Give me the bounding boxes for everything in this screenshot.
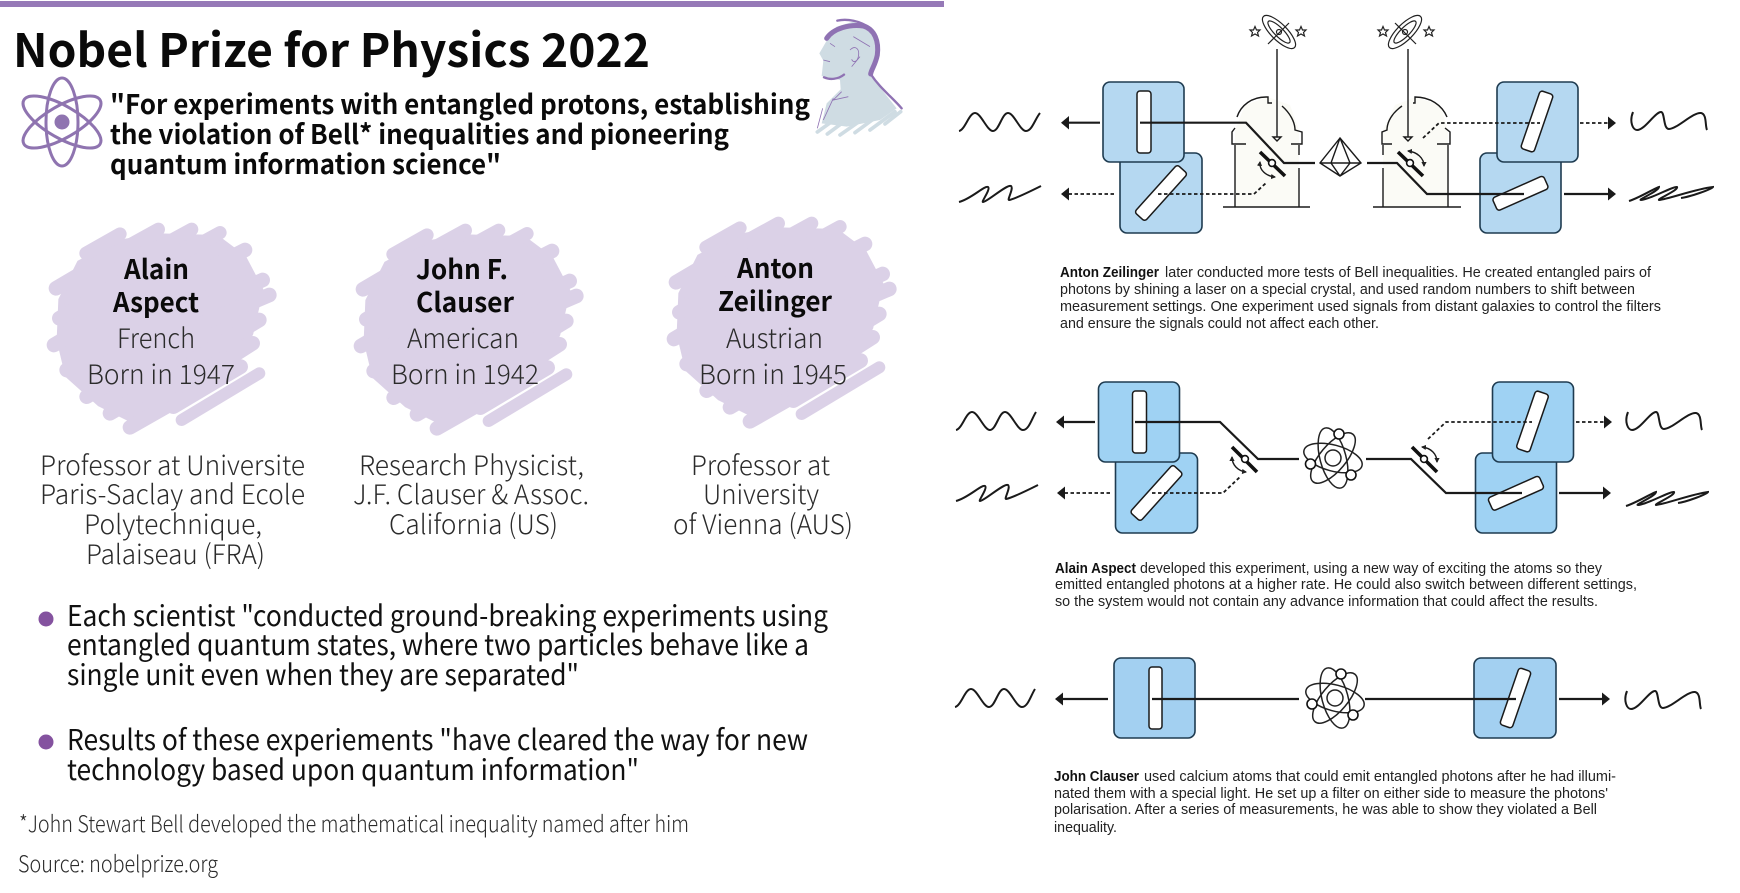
arrowheads [1061,116,1616,200]
bullet: results: Results of these experiements "have cleared the way for new [67,718,808,759]
text: Zeilinger affiliation [673,444,853,542]
text: Zeilinger description: and ensure the signals could not affect each other. [1060,316,1379,332]
filter: top left [1103,82,1184,162]
filter: left [1114,658,1195,738]
bullet: results [38,718,808,789]
photon waves [956,412,1708,506]
name and details: Zeilinger [718,280,832,319]
diagram: Zeilinger experiment [959,11,1713,233]
bullet: results: technology based upon quantum information" [67,748,639,789]
text: Zeilinger description: photons by shining a laser on a special crystal, and used random numbers to shift between [1060,282,1635,298]
text: Zeilinger description: later conducted more tests of Bell inequalities. He created entangled pairs of [1165,265,1652,281]
text: Clauser affiliation [353,444,589,542]
text: Aspect affiliation: Palaiseau (FRA) [86,533,265,572]
text: Clauser description: inequality. [1054,820,1117,836]
text: Zeilinger description: measurement settings. One experiment used signals from distant galaxies to control the filters [1060,299,1661,315]
name and details: John F. [416,248,508,287]
title: Nobel Prize for Physics 2022 [13,15,650,81]
icon: atom [1301,425,1365,491]
name and details: Born in 1945 [699,353,847,392]
filter: right [1474,658,1556,738]
text: Clauser affiliation: California (US) [389,503,558,542]
arrowheads [1056,416,1612,500]
brush blob [361,230,576,428]
bullet: experiments: Each scientist "conducted ground-breaking experiments using [67,594,828,635]
bullet: experiments: single unit even when they are separated" [67,653,579,694]
icon: left observatory [1223,97,1310,207]
text: Clauser affiliation: Research Physicist, [359,444,584,483]
galaxy signals [1273,49,1412,141]
citation quote [110,83,810,182]
filter: top right [1497,82,1578,162]
filter: bottom left [1120,153,1202,233]
photon paths [1066,123,1610,194]
name and details: Born in 1942 [391,353,539,392]
bullet: experiments [38,594,828,694]
name and details [391,248,539,392]
text: Aspect description: so the system would not contain any advance information that could affect the results. [1055,594,1598,610]
icon: right galaxy [1378,11,1434,53]
text: Aspect affiliation: Paris-Saclay and Ecole [40,473,305,512]
panel: John F. Clauser [361,230,576,428]
text: Zeilinger affiliation: University [703,473,819,512]
text: Clauser affiliation: J.F. Clauser & Assoc. [353,473,589,512]
panel: Alain Aspect [54,229,269,427]
name and details: Born in 1947 [87,353,235,392]
name and details: Alain [123,248,189,287]
diagram: Clauser experiment [955,658,1701,738]
photon waves [959,112,1713,202]
diagram: Aspect experiment [956,382,1708,533]
text: Aspect description: developed this experiment, using a new way of exciting the atoms so they [1140,561,1603,577]
citation quote: the violation of Bell* inequalities and pioneering [110,113,729,152]
icon: left galaxy [1250,11,1306,53]
photon paths [1061,698,1605,700]
text: Aspect description: Alain Aspect [1055,561,1136,577]
text: Clauser description: polarisation. After a series of measurements, he was able to show they violated a Bell [1054,802,1597,818]
text: Aspect description [1055,561,1637,610]
header bar [0,1,944,7]
text: Zeilinger description [1060,265,1661,332]
icon: purple atom [16,78,108,166]
text: Clauser description [1054,769,1616,836]
citation quote: "For experiments with entangled protons, establishing [110,83,810,122]
text: Aspect affiliation: Polytechnique, [84,503,262,542]
photon waves [955,689,1701,709]
text: Aspect affiliation [40,444,305,572]
name and details [699,247,847,392]
text: Clauser description: John Clauser [1054,769,1139,785]
name and details: Aspect [112,281,199,320]
switches [1260,151,1424,177]
citation quote: quantum information science" [110,143,501,182]
text: Clauser description: used calcium atoms that could emit entangled photons after he had illumi- [1144,769,1616,785]
bullet: experiments: entangled quantum states, where two particles behave like a [67,623,809,664]
text: Zeilinger affiliation: of Vienna (AUS) [673,503,853,542]
footnote: *John Stewart Bell developed the mathematical inequality named after him [19,807,689,839]
icon: crystal [1320,138,1361,176]
name and details: French [117,317,195,356]
name and details: American [407,317,519,356]
icon: atom [1303,665,1367,731]
text: Aspect affiliation: Professor at Universite [40,444,305,483]
arrowheads [1055,692,1610,706]
filters left and right [1098,382,1574,533]
name and details [87,248,235,392]
text: Clauser description: nated them with a special light. He set up a filter on either side to measure the photons' [1054,786,1608,802]
photon paths [1061,422,1606,493]
text: Zeilinger description: Anton Zeilinger [1060,265,1159,281]
text: Aspect description: emitted entangled photons at a higher rate. He could also switch between different settings, [1055,577,1637,593]
name and details: Austrian [726,317,823,356]
switches [1232,447,1437,472]
name and details: Anton [736,247,814,286]
filter: bottom right [1480,153,1561,233]
text: Zeilinger affiliation: Professor at [691,444,830,483]
source: Source: nobelprize.org [18,847,218,879]
brush blob [54,229,269,427]
icon: right observatory [1373,97,1461,207]
panel: Anton Zeilinger [674,223,889,421]
brush blob [674,223,889,421]
name and details: Clauser [416,281,514,320]
icon: laureate medal portrait [817,20,902,135]
